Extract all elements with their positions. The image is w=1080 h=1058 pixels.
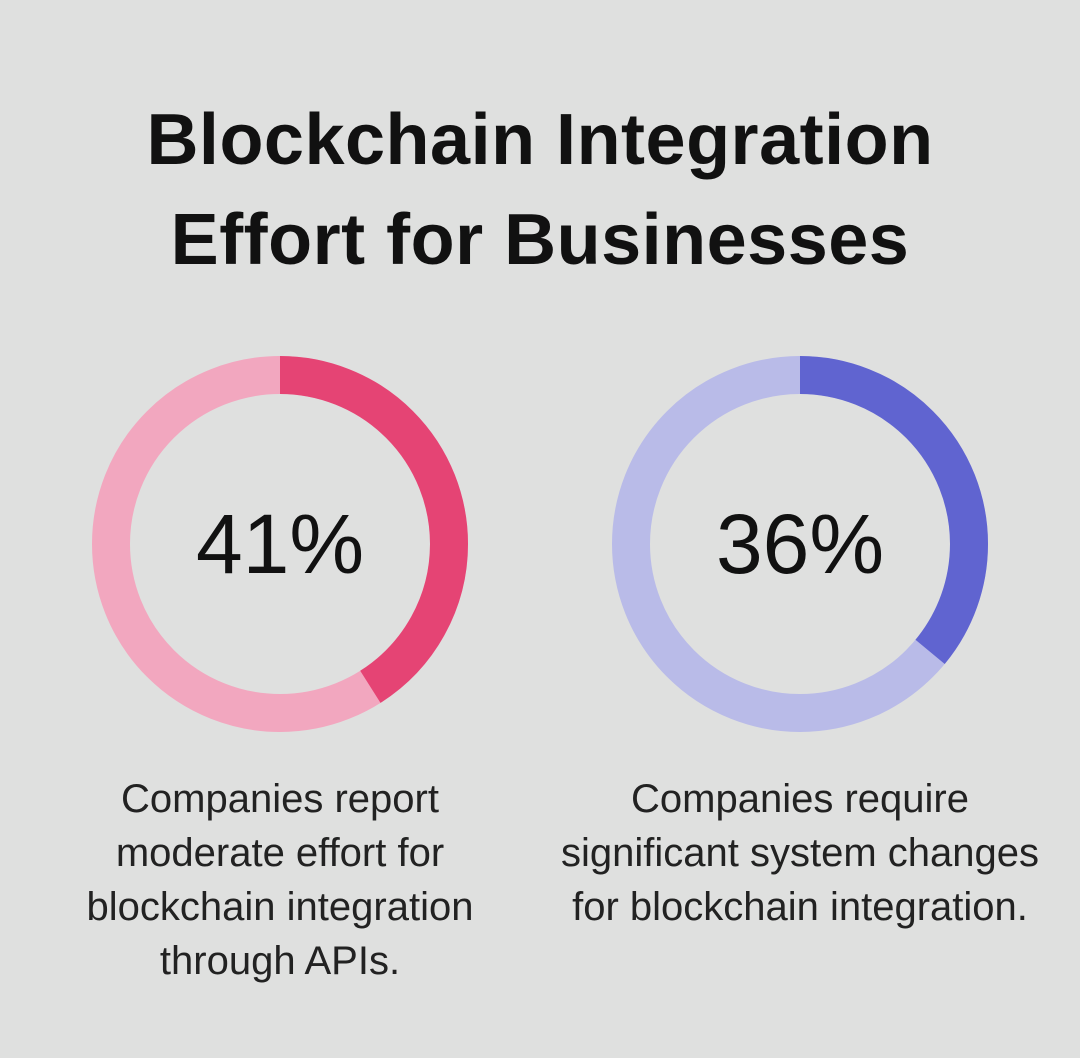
text: left description: through APIs.	[160, 939, 400, 983]
value: 36%: 36%	[716, 497, 884, 591]
chart: 41% donut	[92, 356, 468, 732]
title: Effort for Businesses	[171, 200, 909, 280]
value: 41%: 41%	[196, 497, 364, 591]
title	[146, 100, 934, 280]
text: left description	[87, 777, 473, 983]
title: Blockchain Integration	[146, 100, 934, 180]
text: right description	[561, 777, 1039, 929]
text: right description: for blockchain integration.	[572, 885, 1028, 929]
text: left description: moderate effort for	[116, 831, 444, 875]
chart: 36% donut	[612, 356, 988, 732]
text: left description: Companies report	[121, 777, 439, 821]
text: left description: blockchain integration	[87, 885, 473, 929]
text: right description: Companies require	[631, 777, 969, 821]
text: right description: significant system changes	[561, 831, 1039, 875]
